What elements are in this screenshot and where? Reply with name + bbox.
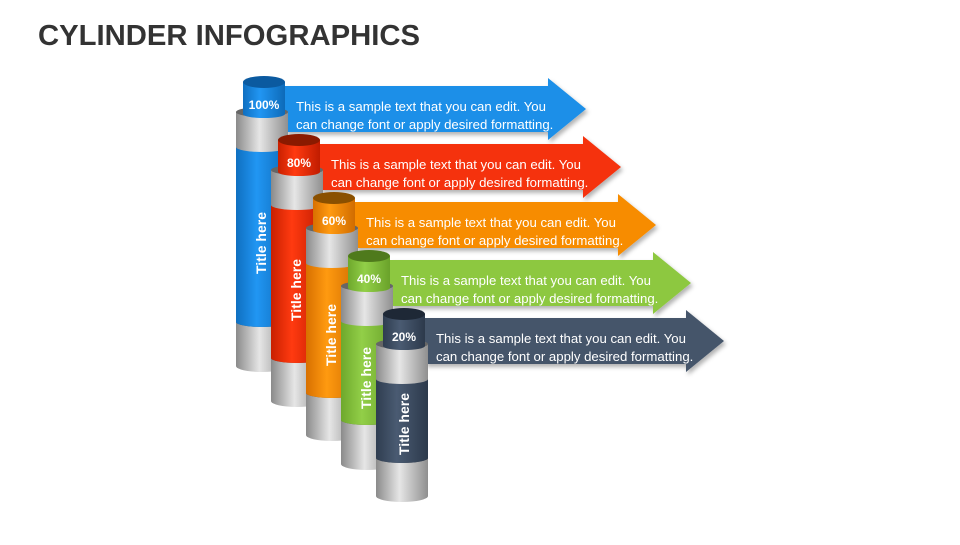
cylinder: green (341, 250, 393, 470)
arrow: blue (285, 78, 586, 140)
cylinder: blue: Title here (253, 212, 269, 274)
item: 20% navy (376, 308, 724, 502)
arrow: navy (425, 310, 724, 372)
arrow: blue: This is a sample text that you can edit. You (296, 99, 546, 114)
item: 60% orange (306, 192, 656, 441)
cylinder: green: Title here (358, 347, 374, 409)
item: 40% green (341, 250, 691, 470)
arrow: navy: can change font or apply desired formatting. (436, 349, 693, 364)
item: 100% blue (236, 76, 586, 372)
arrow: green: This is a sample text that you can edit. You (401, 273, 651, 288)
arrow: green: can change font or apply desired formatting. (401, 291, 658, 306)
arrow: orange: This is a sample text that you can edit. You (366, 215, 616, 230)
cylinder: navy (376, 308, 428, 502)
cylinder: blue: 100% (249, 98, 280, 112)
arrow: orange: can change font or apply desired formatting. (366, 233, 623, 248)
arrow: green (390, 252, 691, 314)
arrow: blue: can change font or apply desired formatting. (296, 117, 553, 132)
cylinder: green: 40% (357, 272, 381, 286)
arrow: red (320, 136, 621, 198)
arrow: navy: This is a sample text that you can edit. You (436, 331, 686, 346)
arrow: orange (355, 194, 656, 256)
cylinder: red: 80% (287, 156, 311, 170)
arrow: red: can change font or apply desired formatting. (331, 175, 588, 190)
item: 80% red (271, 134, 621, 407)
cylinder: navy: 20% (392, 330, 416, 344)
cylinder: orange: Title here (323, 304, 339, 366)
cylinder: blue (236, 76, 288, 372)
cylinder: red (271, 134, 323, 407)
cylinder: orange: 60% (322, 214, 346, 228)
cylinder: orange (306, 192, 358, 441)
arrow: red: This is a sample text that you can edit. You (331, 157, 581, 172)
title: CYLINDER INFOGRAPHICS (38, 20, 420, 52)
cylinder: navy: Title here (396, 393, 412, 455)
cylinder: red: Title here (288, 259, 304, 321)
